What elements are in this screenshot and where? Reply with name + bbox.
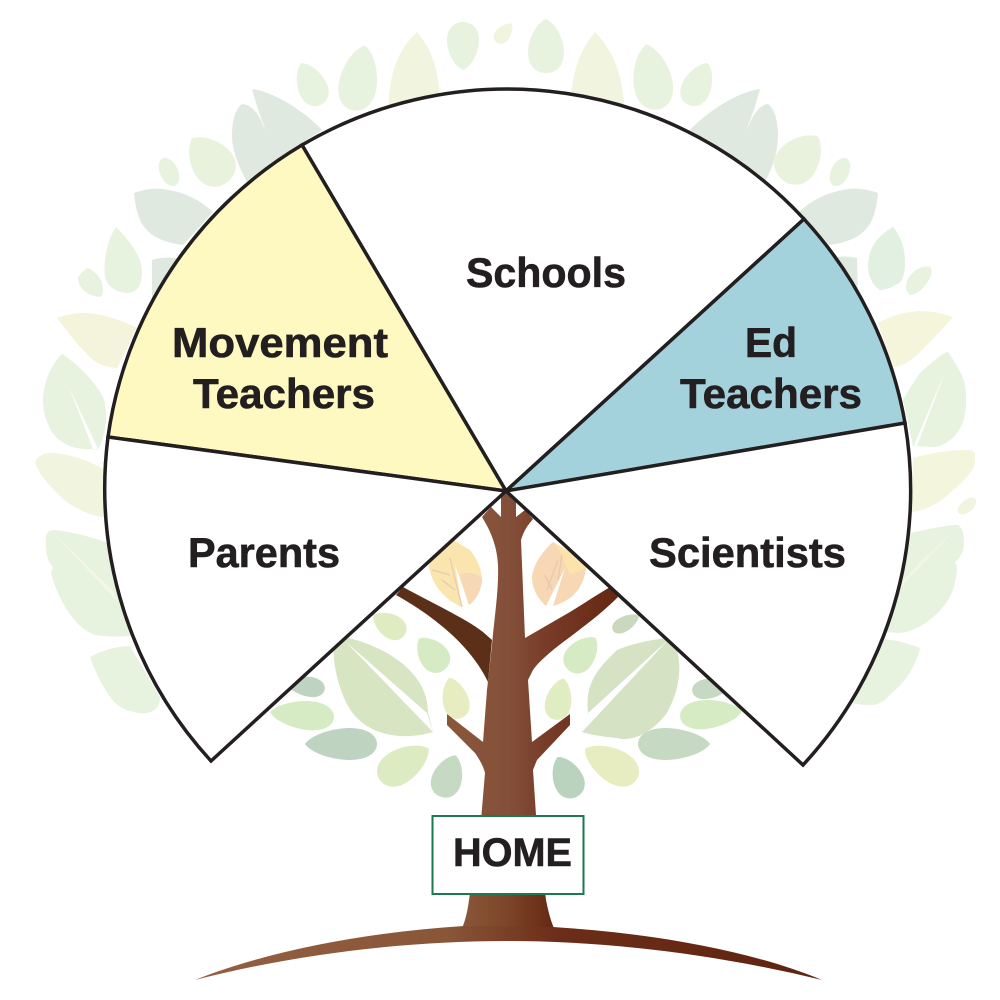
ground arc [195,926,822,980]
sign: HOME [432,816,584,894]
panel: Parents wedge [105,437,506,761]
sign: HOME: HOME [453,831,572,875]
panel: Ed Teachers wedge [506,219,905,491]
label: Scientists: Scientists [649,529,846,576]
label: Movement Teachers: Teachers [193,370,375,417]
label: Movement Teachers [172,319,388,417]
tree trunk and branches [447,490,618,820]
trunk base [460,815,556,932]
label: Movement Teachers: Movement [172,319,388,366]
left autumn leaf [429,538,482,607]
label: Ed Teachers: Teachers [680,370,862,417]
right big leaf [582,637,679,739]
panel: Movement Teachers wedge [108,145,506,491]
panel: Schools wedge [302,89,804,491]
pale background foliage crown [35,19,979,713]
label: Ed Teachers: Ed [745,319,797,366]
left big leaf [333,635,433,736]
panel: Scientists wedge [506,423,911,765]
lower tree leaves [269,538,743,803]
label: Schools: Schools [466,249,626,296]
left dark branch [396,587,492,682]
right autumn leaf [532,542,586,606]
label: Parents: Parents [188,529,340,576]
label: Ed Teachers [680,319,862,417]
